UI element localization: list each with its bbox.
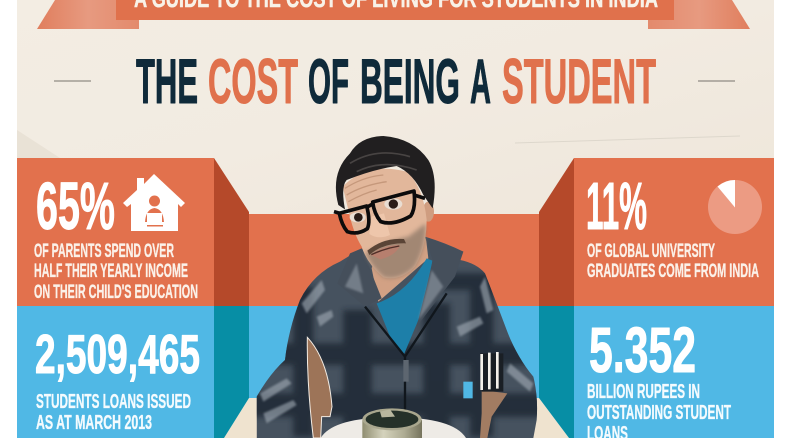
zipper pull xyxy=(403,360,409,382)
description xyxy=(36,391,191,434)
hair highlights xyxy=(350,153,417,172)
right side wall teal xyxy=(539,306,574,438)
description xyxy=(587,241,759,282)
hood highlights xyxy=(345,263,443,320)
blue gap by arm xyxy=(463,382,473,398)
plate xyxy=(321,417,466,438)
paper background xyxy=(17,0,774,214)
panel: 11% graduates xyxy=(574,158,774,306)
description: OF PARENTS SPEND OVER xyxy=(34,241,174,262)
tin can xyxy=(362,408,422,438)
ribbon tail right xyxy=(648,0,750,29)
left side wall orange xyxy=(214,158,249,306)
forehead wrinkles xyxy=(345,175,387,202)
hood collar xyxy=(348,236,464,320)
title: OF xyxy=(308,47,349,117)
ear xyxy=(423,202,434,222)
title: A xyxy=(470,47,491,117)
plaid shading xyxy=(250,273,550,437)
banner ribbon xyxy=(37,0,750,29)
hoodie xyxy=(250,230,550,438)
banner bar xyxy=(116,0,674,20)
glasses xyxy=(334,191,425,233)
illustration: student at table xyxy=(250,136,550,438)
title: STUDENT xyxy=(502,47,656,117)
description: ON THEIR CHILD'S EDUCATION xyxy=(34,282,198,303)
knife xyxy=(307,337,332,438)
fabric highlights xyxy=(260,277,533,423)
description: HALF THEIR YEARLY INCOME xyxy=(34,261,188,282)
description xyxy=(587,381,731,438)
title: COST xyxy=(208,47,298,117)
room: back wall and floor xyxy=(214,158,574,438)
lip line xyxy=(371,246,399,255)
stat 65%: 65% xyxy=(36,169,115,244)
hair xyxy=(336,136,435,209)
stat 2,509,465: 2,509,465 xyxy=(35,323,200,385)
description: AS AT MARCH 2013 xyxy=(36,412,152,434)
eyes xyxy=(350,198,402,222)
zipper xyxy=(365,293,447,417)
nose xyxy=(369,213,390,237)
icon: house with student xyxy=(123,174,185,231)
right side wall orange xyxy=(539,158,574,306)
moustache xyxy=(367,239,406,255)
back wall blue xyxy=(249,306,539,398)
table xyxy=(224,398,569,438)
panel: student loans issued xyxy=(17,306,214,438)
panel: 65% parents xyxy=(17,158,214,306)
t-shirt xyxy=(377,258,432,356)
neck xyxy=(372,230,428,302)
stubble xyxy=(365,223,426,278)
panel: outstanding loans xyxy=(574,306,774,438)
fork xyxy=(480,352,507,438)
description: STUDENTS LOANS ISSUED xyxy=(36,391,191,413)
description xyxy=(34,241,198,303)
icon: pie chart 11% xyxy=(708,180,762,234)
face xyxy=(343,169,427,278)
ribbon tail left xyxy=(37,0,139,29)
title dash left xyxy=(54,80,91,82)
title xyxy=(136,47,656,117)
title: BEING xyxy=(360,47,460,117)
back wall orange xyxy=(249,214,539,306)
left side wall teal xyxy=(214,306,249,438)
mouth xyxy=(371,245,400,259)
panel: 11% graduates: 11% xyxy=(586,169,647,244)
stat 5.352: 5.352 xyxy=(589,314,696,386)
title: THE xyxy=(136,47,198,117)
title dash right xyxy=(698,80,735,82)
description: BILLION RUPEES IN xyxy=(587,381,700,403)
